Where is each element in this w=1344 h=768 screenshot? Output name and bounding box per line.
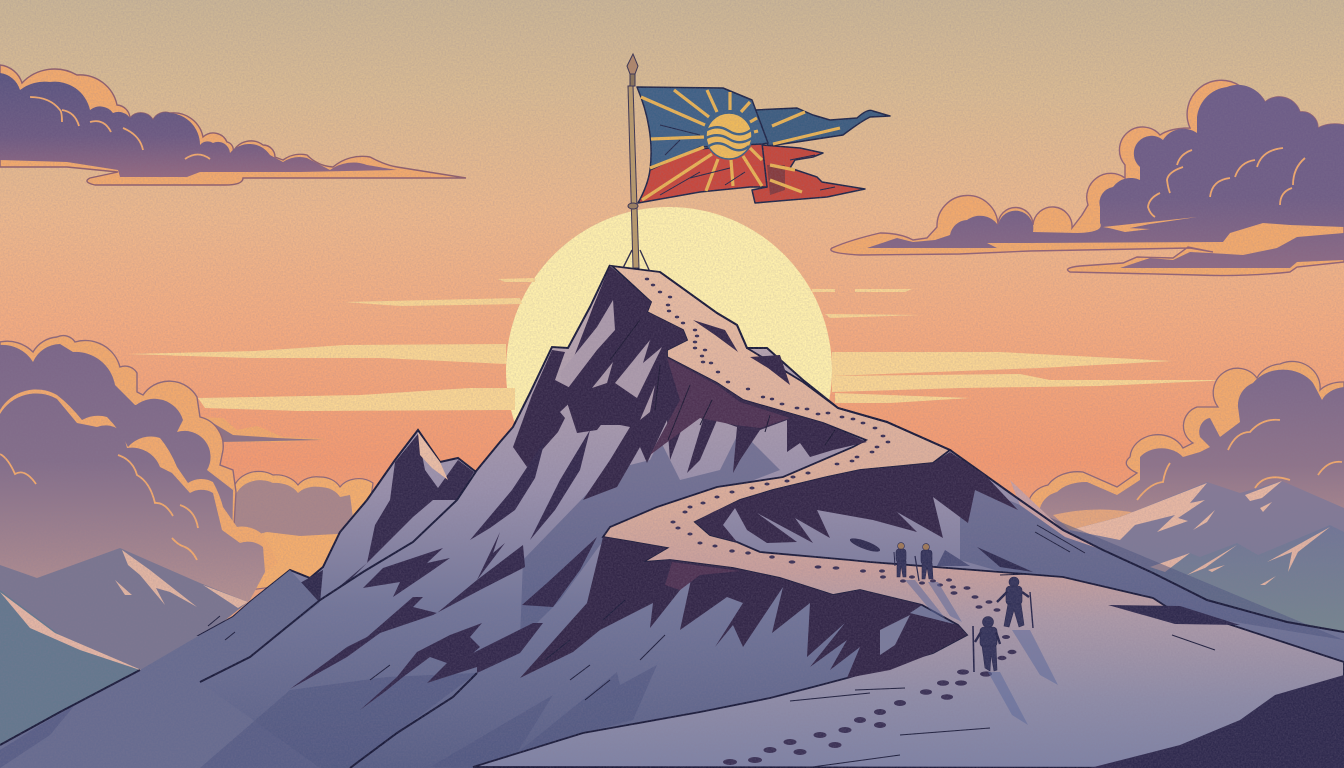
flagpole xyxy=(623,54,650,272)
rock patch: small wedge xyxy=(363,548,450,597)
rock patch: side streak xyxy=(530,430,590,540)
hiker: far left xyxy=(894,543,906,577)
flag tail: blue xyxy=(755,108,890,146)
cloud: middle left xyxy=(0,336,278,640)
main mountain outline xyxy=(0,265,1344,768)
shadow on the snowfield xyxy=(1090,605,1344,768)
dark rock: ridge shadows behind summit xyxy=(513,320,790,467)
mountain shaded slopes xyxy=(0,430,1344,768)
back mountains: left xyxy=(0,548,248,745)
flag body: blue upper field xyxy=(637,87,768,170)
dark rock: upper face xyxy=(560,266,867,500)
hiker: far right xyxy=(915,544,933,581)
hiker shadows xyxy=(905,580,1058,725)
back mountains: right xyxy=(1070,481,1344,650)
dark rock: lower-left patches xyxy=(290,430,597,710)
left foot slope xyxy=(0,570,320,768)
ink hatch lines xyxy=(208,525,1215,768)
flag xyxy=(637,87,890,203)
cloud: back left xyxy=(233,471,373,590)
rock cracks xyxy=(610,320,835,445)
cloud: lower right xyxy=(1028,361,1344,540)
flag emblem: sun and waves xyxy=(706,113,752,159)
flag body: red lower field xyxy=(638,143,767,203)
flag scratches xyxy=(660,125,835,195)
ridge rim light xyxy=(1010,480,1103,550)
flag sun rays xyxy=(641,90,840,200)
cloud: wisp left xyxy=(193,417,327,442)
dark rock: right slope patches xyxy=(849,536,1033,572)
cloud: top right xyxy=(831,80,1344,276)
sun xyxy=(506,207,832,533)
sunset light streaks xyxy=(128,278,1230,411)
footprints on the trail xyxy=(645,278,1016,765)
side peak xyxy=(200,430,476,643)
light streaks in upper rock xyxy=(560,300,662,420)
hiker: near left xyxy=(973,616,1000,672)
rock patch: upper left face xyxy=(470,440,545,540)
main mountain body xyxy=(0,265,1344,768)
flag tail: torn red xyxy=(752,145,865,203)
hikers xyxy=(894,543,1033,672)
rock patch: lower diagonal xyxy=(360,623,543,710)
rock patch: long diagonal xyxy=(290,532,525,689)
flag tail texture xyxy=(767,165,785,195)
dark rock: middle band under the switchback xyxy=(695,452,1018,543)
dark rock: lower band under the trail xyxy=(520,537,967,678)
snow path band and foreground snowfield xyxy=(473,266,1344,768)
cloud: top left xyxy=(0,65,466,185)
hiker: near right xyxy=(997,577,1033,628)
rock patch: upper streak xyxy=(522,537,597,607)
